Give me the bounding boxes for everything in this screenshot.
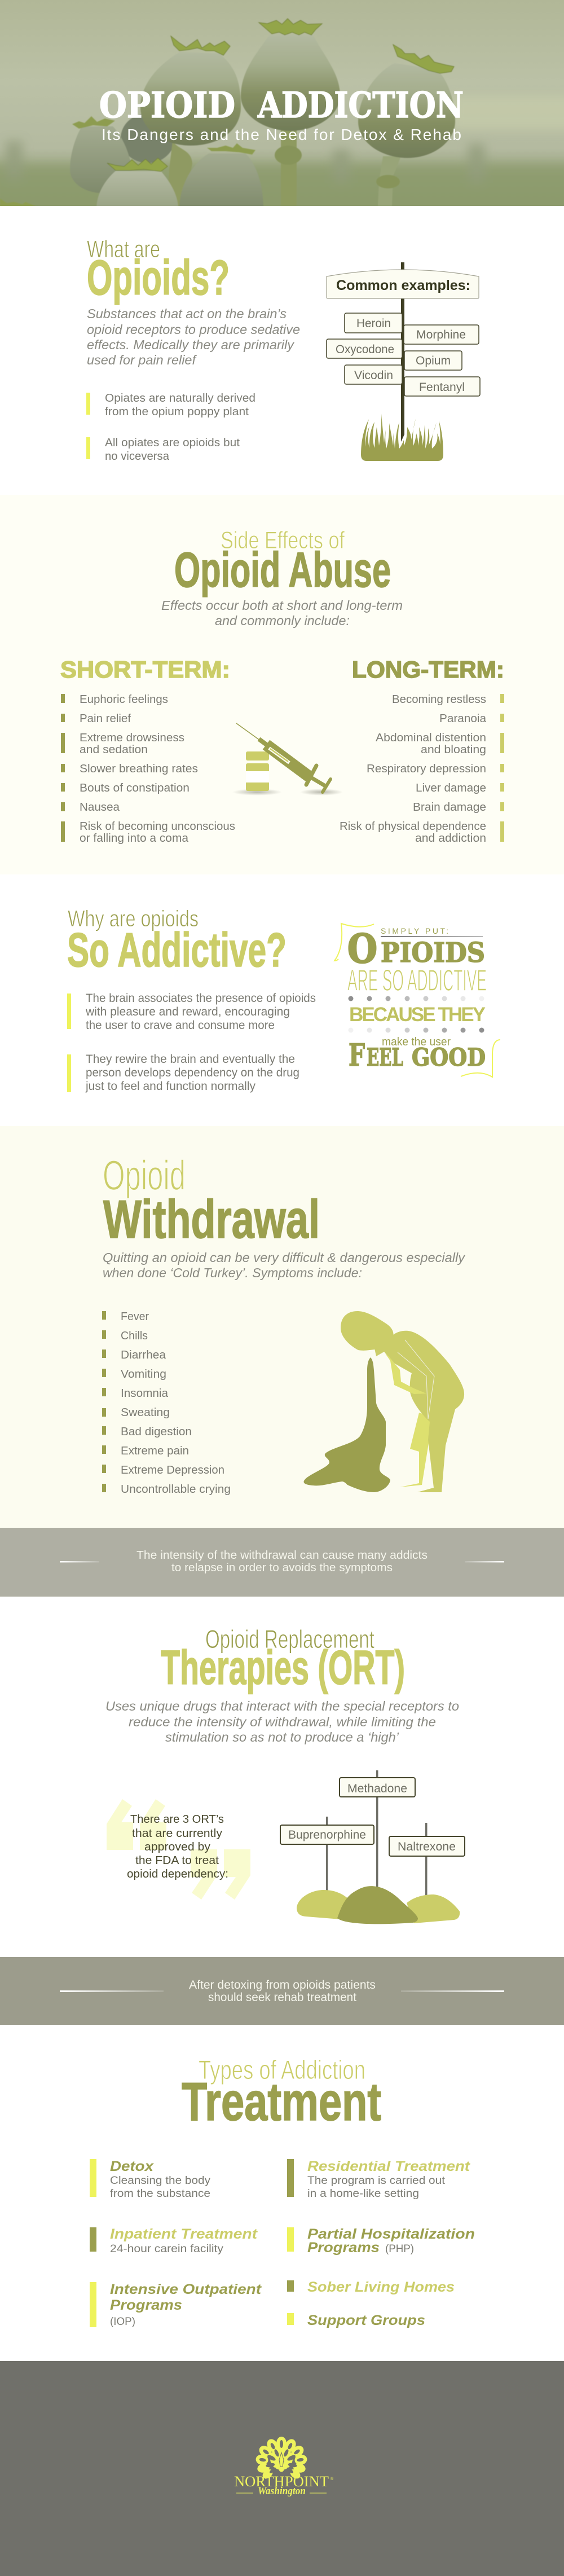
column: short-term: Pain relief — [80, 713, 131, 725]
item: residential treatment: Residential Treatment — [307, 2159, 471, 2174]
quote block: that are currently — [132, 1827, 222, 1840]
intro text: Uses unique drugs that interact with the special receptors to — [105, 1699, 459, 1713]
quote block: opioid dependency: — [127, 1868, 228, 1880]
panel: why are opioids so addictive — [67, 905, 500, 1093]
figure: person vomiting — [304, 1311, 464, 1492]
panel: opioid withdrawal — [0, 1126, 564, 1528]
title: ADDICTION — [257, 84, 464, 126]
title: OPIOID — [99, 84, 235, 126]
reason 1 — [67, 992, 316, 1032]
heading: So Addictive? — [67, 924, 287, 977]
quote block: the FDA to treat — [135, 1854, 219, 1867]
item: residential treatment — [287, 2159, 471, 2200]
column: short-term: Risk of becoming unconscious — [80, 820, 235, 833]
column: short-term: Bouts of constipation — [80, 782, 190, 794]
symptoms list: Vomiting — [121, 1368, 166, 1381]
intro text — [161, 598, 403, 628]
signposts: ORT medications: Naltrexone — [398, 1840, 456, 1853]
heading — [182, 2055, 381, 2132]
symptoms list: Chills — [121, 1330, 148, 1342]
signpost: common examples: Opium — [416, 354, 451, 367]
intro text: and commonly include: — [215, 613, 350, 628]
item: detox: from the substance — [110, 2188, 210, 2200]
heading: Why are opioids — [68, 905, 199, 931]
heading: Opioid Abuse — [174, 543, 391, 597]
signpost: common examples: Morphine — [416, 328, 466, 341]
column: long-term: Risk of physical dependence — [340, 820, 486, 833]
reason 1: The brain associates the presence of opioids — [86, 992, 316, 1005]
item: detox: Cleansing the body — [110, 2175, 211, 2187]
definition text: used for pain relief — [87, 353, 197, 367]
typographic callout: simply put: EEL — [367, 1044, 403, 1072]
logo: Northpoint Washington: ® — [331, 2477, 334, 2481]
typographic callout: simply put: F — [349, 1037, 365, 1073]
item: intensive outpatient: Programs — [110, 2297, 182, 2313]
typographic callout: simply put: SIMPLY PUT: — [381, 926, 448, 935]
heading: Opioid — [103, 1152, 186, 1199]
heading: Opioid Replacement — [205, 1625, 374, 1654]
item: partial hospitalization: (PHP) — [385, 2243, 414, 2255]
panel: footer — [0, 2361, 564, 2576]
logo: Northpoint Washington: NORTHPOINT — [234, 2473, 329, 2490]
callout band: seek rehab: should seek rehab treatment — [208, 1991, 356, 2004]
column: long-term: Abdominal distention — [376, 732, 486, 744]
callout band: relapse warning: The intensity of the withdrawal can cause many addicts — [136, 1549, 428, 1562]
callout band: relapse warning: to relapse in order to avoids the symptoms — [171, 1562, 393, 1574]
item: residential treatment: The program is carried out — [307, 2175, 446, 2187]
item: intensive outpatient: (IOP) — [110, 2316, 135, 2328]
item: partial hospitalization: Partial Hospitalization — [307, 2226, 475, 2242]
item: sober living: Sober Living Homes — [307, 2279, 455, 2295]
item: residential treatment: in a home-like setting — [307, 2188, 419, 2200]
typographic callout: simply put: make the user — [382, 1036, 451, 1048]
reason 1: with pleasure and reward, encouraging — [85, 1005, 290, 1018]
heading: Therapies (ORT) — [161, 1641, 405, 1695]
definition text — [87, 306, 300, 367]
panel: what are opioids — [86, 236, 480, 463]
subtitle: Its Dangers and the Need for Detox & Rehab — [102, 126, 461, 143]
column: short-term — [60, 656, 235, 845]
heading: Types of Addiction — [199, 2055, 365, 2085]
item: inpatient treatment: Inpatient Treatment — [110, 2226, 258, 2242]
intro text: when done ‘Cold Turkey’. Symptoms include: — [103, 1265, 362, 1280]
signpost: common examples: Fentanyl — [419, 381, 465, 394]
typographic callout: simply put: O — [347, 925, 377, 972]
panel: hero header — [0, 0, 564, 214]
hero photo: poppy pods — [0, 0, 564, 214]
column: short-term: and sedation — [80, 744, 148, 756]
quote block — [107, 1799, 250, 1900]
column: short-term: Slower breathing rates — [80, 763, 198, 775]
heading — [87, 236, 230, 305]
signpost: common examples — [327, 262, 480, 461]
logo: Northpoint Washington — [234, 2437, 334, 2497]
heading: Withdrawal — [103, 1189, 320, 1250]
heading — [161, 1625, 405, 1695]
intro text: stimulation so as not to produce a ‘high’ — [165, 1730, 399, 1744]
signposts: ORT medications: Buprenorphine — [288, 1828, 366, 1841]
callout band: relapse warning — [0, 1528, 564, 1597]
panel: opioid replacement therapies — [105, 1625, 465, 1924]
note: opiates derived: from the opium poppy plant — [105, 406, 249, 418]
column: long-term — [340, 656, 504, 845]
signpost: common examples: Vicodin — [354, 369, 393, 382]
typographic callout: simply put: GOOD — [412, 1044, 486, 1072]
note: opiates derived: Opiates are naturally derived — [105, 392, 255, 405]
item: support groups: Support Groups — [307, 2313, 425, 2328]
note: opiates derived — [86, 392, 255, 418]
intro text: Quitting an opioid can be very difficult & dangerous especially — [103, 1250, 466, 1265]
heading — [174, 527, 391, 597]
column: short-term: or falling into a coma — [80, 832, 189, 845]
column: long-term: and addiction — [415, 832, 486, 845]
item: detox — [90, 2159, 211, 2200]
column: long-term: Paranoia — [439, 713, 487, 725]
symptoms list — [102, 1311, 231, 1496]
intro text — [105, 1699, 459, 1744]
symptoms list: Bad digestion — [121, 1426, 192, 1438]
column: short-term: SHORT-TERM: — [60, 656, 230, 683]
signpost: common examples: Heroin — [356, 317, 391, 330]
symptoms list: Fever — [121, 1311, 149, 1323]
reason 2 — [67, 1053, 299, 1093]
definition text: opioid receptors to produce sedative — [87, 322, 300, 337]
panel: types of addiction treatment — [90, 2055, 475, 2328]
reason 2: They rewire the brain and eventually the — [86, 1053, 295, 1066]
title — [99, 84, 464, 126]
item: partial hospitalization — [287, 2226, 475, 2256]
signpost: common examples: Oxycodone — [336, 343, 394, 356]
reason 2: person develops dependency on the drug — [86, 1066, 299, 1079]
item: intensive outpatient — [90, 2282, 262, 2328]
heading — [67, 905, 287, 977]
reason 2: just to feel and function normally — [85, 1080, 255, 1093]
column: long-term: Respiratory depression — [367, 763, 486, 775]
quote block: There are 3 ORT’s — [130, 1813, 224, 1826]
symptoms list: Uncontrollable crying — [121, 1483, 231, 1496]
intro text: Effects occur both at short and long-term — [161, 598, 403, 613]
note: all opiates: no viceversa — [105, 450, 170, 463]
column: long-term: and bloating — [421, 744, 486, 756]
signposts: ORT medications — [280, 1770, 465, 1924]
quote block: approved by — [144, 1841, 210, 1853]
item: detox: Detox — [110, 2159, 154, 2174]
callout band: seek rehab — [0, 1957, 564, 2025]
logo: Northpoint Washington: Washington — [258, 2485, 306, 2497]
intro text — [103, 1250, 466, 1280]
reason 1: the user to crave and consume more — [86, 1019, 275, 1032]
typographic callout: simply put — [334, 924, 500, 1077]
heading: Side Effects of — [221, 527, 345, 554]
item: intensive outpatient: Intensive Outpatient — [110, 2282, 262, 2297]
intro text: reduce the intensity of withdrawal, while limiting the — [129, 1715, 436, 1729]
heading: Treatment — [182, 2072, 381, 2132]
column: long-term: LONG-TERM: — [352, 656, 504, 683]
column: long-term: Becoming restless — [392, 693, 486, 706]
signposts: ORT medications: Methadone — [347, 1782, 407, 1795]
heading: Opioids? — [87, 250, 230, 305]
typographic callout: simply put: BECAUSE THEY — [349, 1004, 486, 1026]
heading: What are — [87, 236, 160, 263]
callout band: seek rehab: After detoxing from opioids patients — [189, 1979, 376, 1992]
signpost: common examples: Common examples: — [336, 278, 470, 293]
column: long-term: Liver damage — [416, 782, 486, 794]
symptoms list: Insomnia — [121, 1387, 169, 1400]
symptoms list: Extreme pain — [121, 1445, 189, 1457]
note: all opiates: All opiates are opioids but — [105, 437, 240, 449]
column: long-term: Brain damage — [413, 801, 486, 814]
definition text: Substances that act on the brain’s — [87, 306, 287, 321]
column: short-term: Nausea — [80, 801, 120, 814]
item: inpatient treatment — [90, 2226, 258, 2255]
heading — [103, 1152, 320, 1250]
note: all opiates — [86, 437, 240, 463]
column: short-term: Euphoric feelings — [80, 693, 168, 706]
symptoms list: Extreme Depression — [121, 1464, 224, 1476]
column: short-term: Extreme drowsiness — [80, 732, 184, 744]
panel: side effects of opioid abuse — [0, 495, 564, 874]
definition text: effects. Medically they are primarily — [87, 337, 295, 352]
typographic callout: simply put: PIOIDS — [381, 937, 485, 969]
item: inpatient treatment: 24-hour carein facility — [110, 2243, 224, 2255]
icon: syringe and vial — [232, 723, 343, 795]
symptoms list: Diarrhea — [121, 1349, 166, 1361]
item: partial hospitalization: Programs — [307, 2240, 380, 2256]
symptoms list: Sweating — [121, 1406, 170, 1419]
